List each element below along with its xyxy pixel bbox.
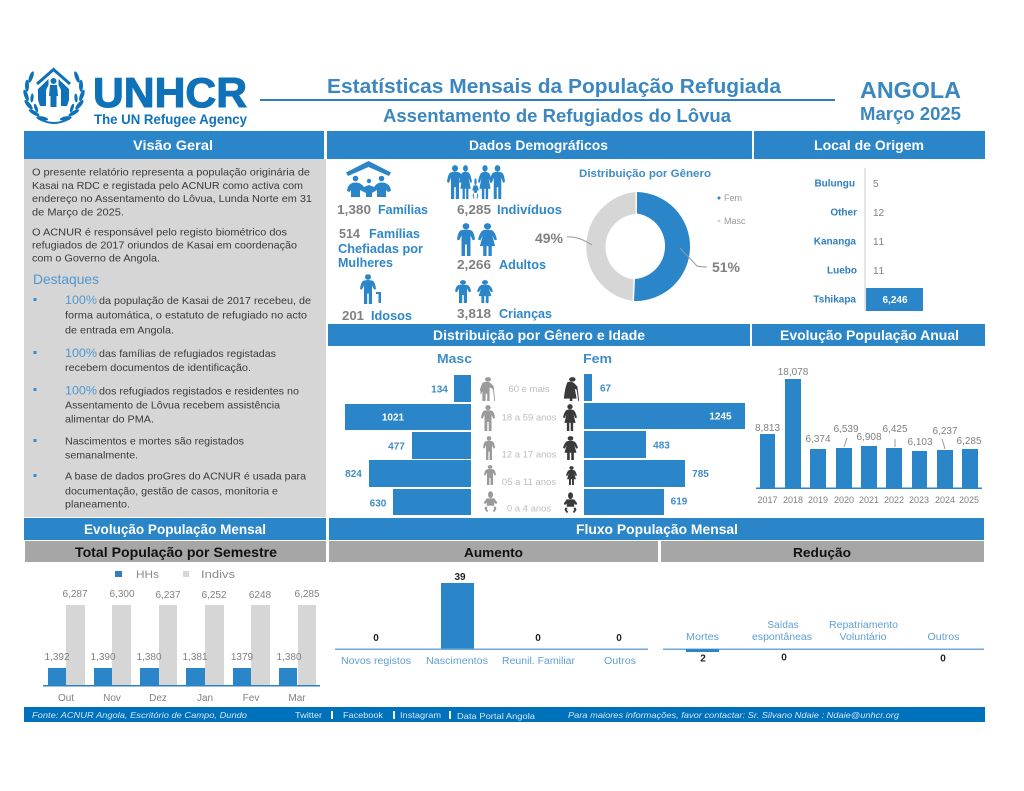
footer links: Data Portal Angola xyxy=(457,711,535,721)
annual values xyxy=(755,367,982,448)
header bar: Evolução População Anual xyxy=(752,324,985,346)
stat: individuals xyxy=(457,203,562,217)
legend xyxy=(115,569,236,581)
annual axis labels xyxy=(757,495,979,505)
highlight 2: recebem documentos de identificação. xyxy=(65,363,251,374)
legend: Masc xyxy=(724,216,746,226)
donut slice: Fem 51% xyxy=(634,192,690,301)
households values: 1,381 xyxy=(182,652,208,663)
footer source: Fonte: ACNUR Angola, Escritório de Campo, Dundo xyxy=(32,710,247,720)
individuals values: 6,252 xyxy=(201,590,227,601)
stat: adults: Adultos xyxy=(499,258,546,272)
subheader: Aumento xyxy=(329,541,658,562)
male values: 1021 xyxy=(382,412,405,424)
logo: UNHCR xyxy=(22,69,247,127)
annual axis labels: 2019 xyxy=(808,495,828,505)
origin values: 5 xyxy=(873,179,879,190)
highlight 3: alimentar do PMA. xyxy=(65,414,154,426)
title: Estatísticas Mensais da População Refugiada xyxy=(327,76,782,98)
male bars xyxy=(345,375,471,515)
households bars xyxy=(48,668,297,685)
decrease values: 0 xyxy=(781,652,787,664)
decrease values: 2 xyxy=(700,654,706,664)
legend: HHs xyxy=(136,569,160,581)
header bar: Distribuição por Gênero e Idade xyxy=(328,324,750,346)
stat: families xyxy=(337,203,428,217)
header bar: Evolução População Anual: Evolução População Anual xyxy=(780,328,959,343)
stat: adults: 2,266 xyxy=(457,258,491,272)
increase labels: Nascimentos xyxy=(426,656,488,667)
bar chart: population decrease xyxy=(663,620,984,664)
subheader: Redução xyxy=(661,541,984,562)
female values: 1245 xyxy=(709,412,732,422)
bar chart: monthly population xyxy=(43,569,320,704)
header bar: Fluxo População Mensal: Fluxo População Mensal xyxy=(576,522,738,537)
month labels: Dez xyxy=(149,693,167,704)
annual values: 6,374 xyxy=(805,434,831,445)
annual values: 6,908 xyxy=(856,432,882,443)
bar chart: population increase xyxy=(335,572,648,667)
stat: families: 1,380 xyxy=(337,203,371,217)
female values: 619 xyxy=(671,496,688,508)
stat: individuals: Indivíduos xyxy=(497,203,562,217)
male values: 824 xyxy=(345,469,362,480)
individuals values: 6248 xyxy=(249,590,272,601)
bar: Nascimentos xyxy=(441,583,474,649)
subheader: Redução: Redução xyxy=(793,545,851,560)
header bar: Fluxo População Mensal xyxy=(329,518,984,540)
female bars xyxy=(584,374,745,515)
stat: children: Crianças xyxy=(499,307,552,321)
origin values: 6,246 xyxy=(882,295,908,306)
footer xyxy=(24,707,985,722)
footer links: Facebook xyxy=(343,710,384,720)
highlight 2 xyxy=(34,346,276,374)
icons: male age groups xyxy=(480,377,497,512)
increase values: 39 xyxy=(454,572,466,583)
month labels: Out xyxy=(58,693,74,704)
label 51%: 51% xyxy=(712,259,741,275)
header bar: Visão Geral xyxy=(24,131,324,159)
individuals values: 6,300 xyxy=(109,589,135,600)
individuals values: 6,287 xyxy=(62,589,88,600)
increase values: 0 xyxy=(616,633,622,644)
annual bars xyxy=(760,379,978,488)
annual axis labels: 2024 xyxy=(935,495,955,505)
highlight 4: Nascimentos e mortes são registados xyxy=(65,436,244,448)
icon: UNHCR wreath and shelter xyxy=(22,70,86,124)
highlight 5 xyxy=(34,472,306,510)
male values: 134 xyxy=(431,384,448,396)
header bar: Evolução População Mensal xyxy=(24,518,326,540)
annual values: 18,078 xyxy=(778,367,809,378)
stat: elderly: 201 xyxy=(342,309,364,323)
highlight 4 xyxy=(34,436,244,462)
origin labels: Luebo xyxy=(827,266,857,276)
label 51% xyxy=(680,248,741,275)
bar chart: annual population xyxy=(755,367,982,505)
households values xyxy=(44,652,302,663)
decrease labels xyxy=(686,620,960,643)
annual values: 6,425 xyxy=(882,424,908,435)
date: Março 2025 xyxy=(860,104,961,124)
label 49%: 49% xyxy=(535,230,564,246)
decrease values xyxy=(700,652,946,664)
annual values: 6,237 xyxy=(932,426,958,437)
month labels: Fev xyxy=(243,693,259,704)
stat: female-headed families: Chefiadas por xyxy=(338,242,423,256)
bar: Mortes xyxy=(686,649,719,652)
highlight 1: forma automática, o estatuto de refugiado no acto xyxy=(65,310,307,322)
origin values: 12 xyxy=(873,208,885,219)
responsibility paragraph: O ACNUR é responsável pelo registo biométrico dos xyxy=(32,228,287,238)
responsibility paragraph: com o Governo de Angola. xyxy=(32,254,160,264)
decrease labels: Saídas xyxy=(767,620,799,631)
highlight 2: das famílias de refugiados registadas xyxy=(99,349,276,360)
intro paragraph: de Março de 2025. xyxy=(32,208,124,218)
highlight 4: semanalmente. xyxy=(65,450,138,462)
heading: Destaques: Destaques xyxy=(33,271,99,287)
origin labels: Kananga xyxy=(814,236,856,248)
highlight 5: documentação, gestão de casos, monitoria e xyxy=(65,486,278,498)
stat: female-headed families: Mulheres xyxy=(338,256,393,270)
header bar: Visão Geral: Visão Geral xyxy=(133,138,213,153)
individuals values xyxy=(62,589,320,601)
label 49% xyxy=(535,230,592,246)
panel: overview text xyxy=(24,159,326,517)
icon: elderly xyxy=(360,274,381,304)
panel: demographics figures xyxy=(337,161,562,323)
header bar: Local de Origem xyxy=(754,131,985,159)
age group labels: 18 a 59 anos xyxy=(502,412,557,424)
increase labels: Reunil. Familiar xyxy=(502,656,576,667)
stat: elderly xyxy=(342,309,412,323)
stat: children xyxy=(457,307,552,321)
decrease values: 0 xyxy=(940,654,946,664)
increase labels: Novos registos xyxy=(341,656,411,667)
male values: 477 xyxy=(388,442,405,452)
icon: family under shelter xyxy=(346,161,391,197)
households values: 1379 xyxy=(231,652,254,663)
origin labels xyxy=(813,178,857,306)
stat: female-headed families xyxy=(338,227,423,270)
households values: 1,380 xyxy=(136,652,162,663)
donut chart: gender distribution xyxy=(535,168,746,301)
subheader: Total População por Semestre: Total População por Semestre xyxy=(75,545,277,560)
highlight 1: 100% xyxy=(65,293,97,307)
households values: 1,390 xyxy=(90,652,116,663)
decrease labels: Voluntário xyxy=(840,632,887,643)
origin labels: Tshikapa xyxy=(813,294,856,306)
chart title: Distribuição por Gênero xyxy=(579,168,711,180)
annual values: 6,285 xyxy=(956,436,982,447)
logo tagline: The UN Refugee Agency xyxy=(94,111,247,127)
increase values: 0 xyxy=(373,633,379,644)
age group labels: 05 a 11 anos xyxy=(502,477,556,488)
female values: 67 xyxy=(600,384,611,394)
header bar: Evolução População Mensal: Evolução População Mensal xyxy=(84,522,266,537)
subheader: Total População por Semestre xyxy=(25,541,326,562)
stat: female-headed families: Famílias xyxy=(369,227,420,241)
label: Masc: Masc xyxy=(437,351,472,366)
decrease labels: Outros xyxy=(928,632,960,643)
month labels: Nov xyxy=(103,693,121,704)
annual axis labels: 2017 xyxy=(757,495,778,505)
responsibility paragraph: refugiados de 2017 oriundos de Kasai em coordenação xyxy=(32,240,297,252)
icon: children xyxy=(455,280,493,303)
stat: adults xyxy=(457,258,546,272)
icons: female age groups xyxy=(563,377,579,513)
households values: 1,392 xyxy=(44,652,70,663)
annual axis labels: 2023 xyxy=(909,495,929,505)
logo wordmark: UNHCR xyxy=(93,69,247,116)
origin values xyxy=(873,179,908,306)
female values: 483 xyxy=(653,440,670,452)
responsibility paragraph xyxy=(32,228,297,264)
intro paragraph: Kasai na RDC e registada pelo ACNUR como activa com xyxy=(32,181,303,192)
legend xyxy=(718,193,746,226)
month labels: Mar xyxy=(288,693,306,704)
age group labels: 60 e mais xyxy=(508,384,550,395)
annual axis labels: 2021 xyxy=(859,495,879,505)
increase values xyxy=(373,572,622,644)
male values xyxy=(345,384,448,510)
highlight 3: 100% xyxy=(65,384,97,398)
footer contact: Para maiores informações, favor contactar: Sr. Silvano Ndaie : Ndaie@unhcr.org xyxy=(568,710,899,720)
increase labels xyxy=(341,656,636,667)
individuals values: 6,237 xyxy=(155,590,181,601)
highlight 5: A base de dados proGres do ACNUR é usada para xyxy=(65,472,306,482)
annual axis labels: 2020 xyxy=(834,495,854,505)
annual axis labels: 2025 xyxy=(959,495,979,505)
female values xyxy=(600,384,732,508)
decrease labels: Repatriamento xyxy=(829,620,898,631)
highlight 3: Assentamento de Lôvua recebem assistência xyxy=(65,400,280,412)
bar: Tshikapa xyxy=(866,288,923,311)
age group labels: 0 a 4 anos xyxy=(507,504,551,514)
increase labels: Outros xyxy=(604,656,636,667)
male values: 630 xyxy=(370,498,387,510)
origin values: 11 xyxy=(873,237,884,248)
label: Fem: Fem xyxy=(583,351,612,366)
subheader: Aumento: Aumento xyxy=(464,545,523,560)
origin labels: Other xyxy=(830,208,857,218)
individuals values: 6,285 xyxy=(294,589,320,600)
stat: elderly: Idosos xyxy=(371,309,412,323)
decrease labels: Mortes xyxy=(686,632,719,643)
age group labels xyxy=(502,384,557,514)
header bar: Distribuição por Gênero e Idade: Distribuição por Gênero e Idade xyxy=(433,328,646,343)
decrease labels: espontâneas xyxy=(752,632,812,643)
highlight 3: dos refugiados registados e residentes no xyxy=(99,386,299,398)
annual axis labels: 2018 xyxy=(783,495,803,505)
footer links xyxy=(295,710,535,721)
increase values: 0 xyxy=(535,633,541,644)
footer links: Twitter xyxy=(295,710,322,720)
header bar: Local de Origem: Local de Origem xyxy=(814,138,924,153)
footer links: Instagram xyxy=(400,710,441,720)
households values: 1,380 xyxy=(276,652,302,663)
origin labels: Bulungu xyxy=(814,178,855,190)
age group labels: 12 a 17 anos xyxy=(502,450,557,460)
subtitle: Assentamento de Refugiados do Lôvua xyxy=(383,106,732,126)
highlight 1 xyxy=(34,293,311,336)
female values: 785 xyxy=(692,469,709,480)
month labels: Jan xyxy=(197,693,213,704)
legend: Indivs xyxy=(201,569,236,581)
header bar: Dados Demográficos xyxy=(327,131,752,159)
annual values: 8,813 xyxy=(755,423,780,434)
intro paragraph: endereço no Assentamento do Lôvua, Lunda Norte em 31 xyxy=(32,194,312,205)
population pyramid xyxy=(345,351,745,515)
icon: group of individuals xyxy=(447,165,505,199)
highlight 1: de entrada em Angola. xyxy=(65,326,174,336)
stat: families: Famílias xyxy=(378,203,428,217)
month labels xyxy=(58,693,306,704)
highlight 1: da população de Kasai de 2017 recebeu, de xyxy=(99,296,311,307)
highlight 2: 100% xyxy=(65,346,97,360)
donut slice: Masc 49% xyxy=(586,192,636,301)
annual values: 6,103 xyxy=(907,437,933,448)
stat: children: 3,818 xyxy=(457,307,491,321)
legend: Fem xyxy=(724,193,742,203)
annual axis labels: 2022 xyxy=(884,495,904,505)
individuals bars xyxy=(66,605,316,685)
stat: individuals: 6,285 xyxy=(457,203,491,217)
icon: adults xyxy=(457,223,497,256)
intro paragraph xyxy=(32,168,312,218)
origin values: 11 xyxy=(873,266,884,277)
highlight 5: planeamento. xyxy=(65,500,130,510)
stat: female-headed families: 514 xyxy=(339,227,360,241)
intro paragraph: O presente relatório representa a população originária de xyxy=(32,168,310,178)
highlight 3 xyxy=(34,384,299,426)
header bar: Dados Demográficos: Dados Demográficos xyxy=(469,138,608,153)
annual values: 6,539 xyxy=(833,424,859,435)
country: ANGOLA xyxy=(860,77,961,103)
bar chart: place of origin xyxy=(813,168,923,311)
